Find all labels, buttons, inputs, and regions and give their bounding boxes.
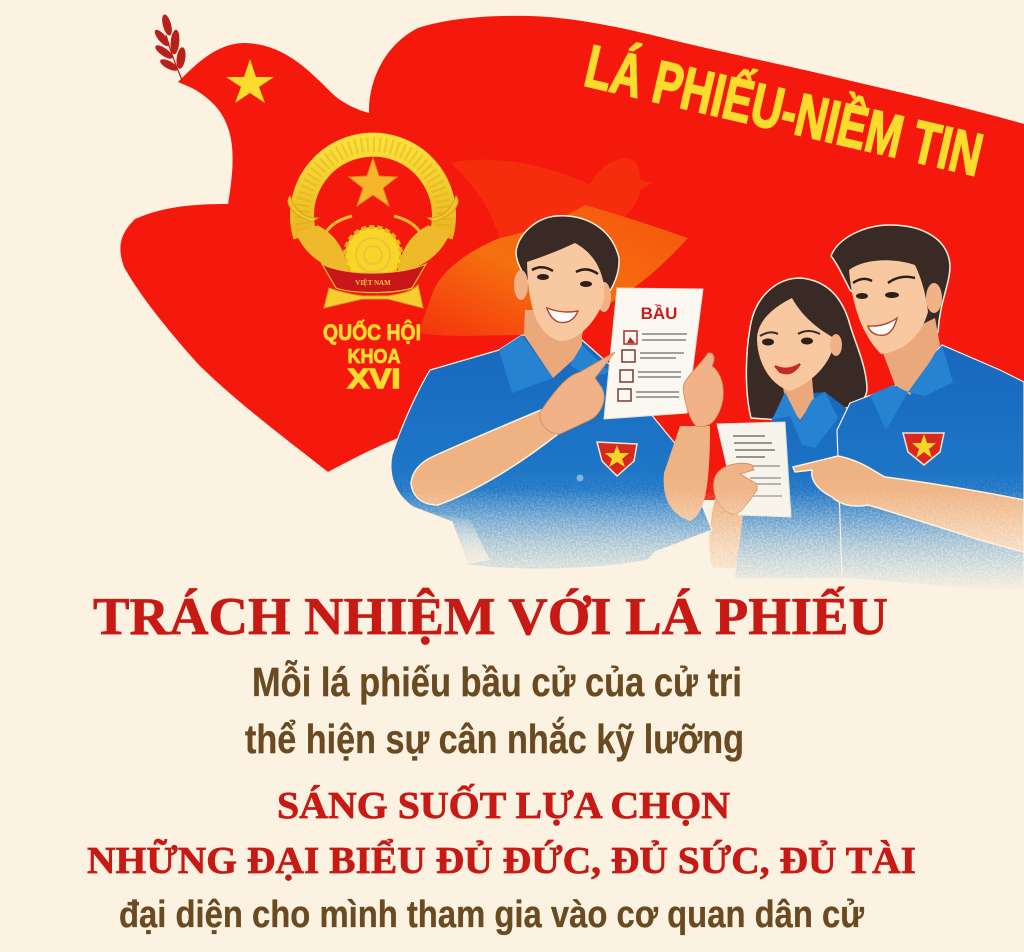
left man: pointing hand: [540, 352, 615, 434]
right man: shirt: [837, 345, 1024, 590]
paper held by the woman: [717, 422, 791, 517]
emblem: rice sheaves: [296, 216, 450, 272]
icon: yellow star on dove head: [226, 59, 274, 103]
person: left man: [391, 216, 712, 569]
left man: features: [532, 267, 598, 323]
ballot heading: BẦU: [641, 304, 677, 323]
label: QUỐC HỘI KHÓA XVI: QUỐC HỘI: [323, 319, 421, 345]
label: QUỐC HỘI KHÓA XVI: [323, 319, 421, 394]
person: right man: [793, 225, 1024, 590]
left man: badge: [597, 442, 637, 476]
national emblem: [288, 145, 458, 308]
dove-shaped red flag: [120, 16, 1024, 500]
flag: orange lower wing: [418, 205, 688, 336]
emblem: base: [324, 285, 423, 308]
heading: TRÁCH NHIỆM VỚI LÁ PHIẾU: TRÁCH NHIỆM VỚI LÁ PHIẾU: [93, 586, 888, 646]
right man: ear: [926, 283, 942, 313]
right man: forearm and hand: [793, 456, 1024, 552]
woman: neck: [782, 378, 814, 420]
woman: shirt: [735, 392, 850, 578]
right man: hair: [831, 225, 950, 332]
text block: closing line: đại diện cho mình tham gia vào cơ quan dân cử: [119, 894, 864, 936]
ballot paper: [604, 288, 703, 419]
left man: ears: [514, 270, 611, 312]
right man: features: [853, 277, 915, 335]
label: QUỐC HỘI KHÓA XVI: KHOA: [348, 346, 400, 368]
right man: face: [849, 260, 928, 354]
right man: badge: [903, 433, 944, 465]
person: woman: [709, 278, 867, 578]
right man: neck: [880, 318, 940, 395]
woman: features: [760, 331, 820, 373]
woman: collar: [772, 392, 838, 448]
icon: olive sprig: [153, 14, 186, 80]
text block: intro line 1: Mỗi lá phiếu bầu cử của cử tri: [252, 659, 742, 705]
woman: ear: [830, 334, 842, 356]
woman: hair: [746, 278, 867, 420]
right man: collar: [870, 345, 953, 430]
subheading: SÁNG SUỐT LỰA CHỌN: SÁNG SUỐT LỰA CHỌN: [277, 783, 730, 827]
flag: faint dove silhouette: [450, 158, 652, 240]
left man: holding hand: [683, 353, 723, 427]
label: QUỐC HỘI KHÓA XVI: XVI: [348, 363, 400, 394]
ballot check boxes: [618, 331, 637, 401]
left man: face: [527, 243, 604, 341]
woman: arm: [709, 495, 745, 568]
woman: hand: [714, 463, 757, 514]
subheading: NHỮNG ĐẠI BIỂU ĐỦ ĐỨC, ĐỦ SỨC, ĐỦ TÀI: NHỮNG ĐẠI BIỂU ĐỦ ĐỨC, ĐỦ SỨC, ĐỦ TÀI: [87, 838, 916, 882]
bottom fade over figures: [385, 470, 1024, 600]
left man: collars: [499, 335, 610, 393]
left man: hair: [516, 216, 619, 300]
left man: neck: [524, 310, 590, 378]
emblem: ribbon: VIỆT NAM: [355, 279, 391, 287]
emblem: wreath ring: [288, 145, 458, 236]
left man: forearm: [411, 410, 558, 505]
text block: intro line 2: thể hiện sự cân nhắc kỹ lưỡng: [245, 716, 744, 762]
emblem: gear: [345, 227, 401, 283]
emblem: star: [349, 158, 397, 206]
left man: right arm: [664, 426, 710, 521]
left man: shirt buttons: [576, 474, 584, 482]
left man: shirt: [391, 335, 712, 569]
woman: face: [757, 298, 834, 391]
emblem: ribbon: [322, 264, 426, 292]
